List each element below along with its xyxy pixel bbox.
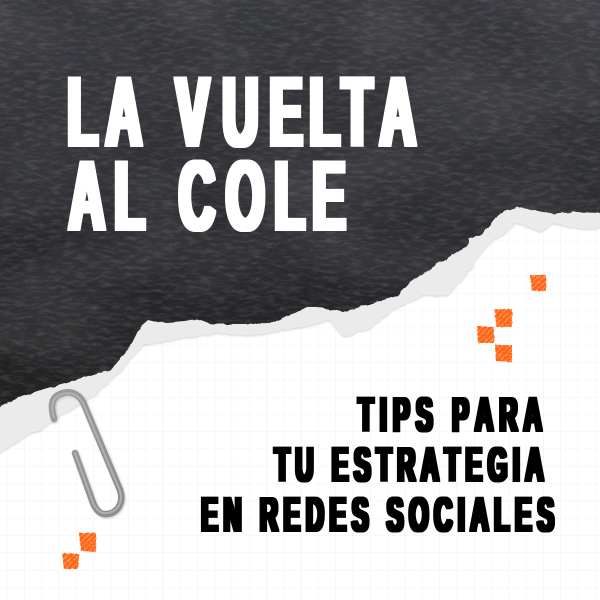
- chalkboard background: [0, 0, 600, 440]
- title: AL COLE: [69, 140, 346, 252]
- title: LA VUELTA: [68, 56, 416, 168]
- subtitle: TIPS PARA: [358, 388, 548, 442]
- torn paper edge: [0, 197, 600, 452]
- subtitle: [201, 388, 560, 542]
- subtitle: EN REDES SOCIALES: [201, 488, 560, 542]
- subtitle: TU ESTRATEGIA: [275, 438, 549, 492]
- icon: orange scribble squares: [62, 275, 546, 569]
- title: [68, 56, 416, 252]
- icon: paperclip: [52, 392, 121, 514]
